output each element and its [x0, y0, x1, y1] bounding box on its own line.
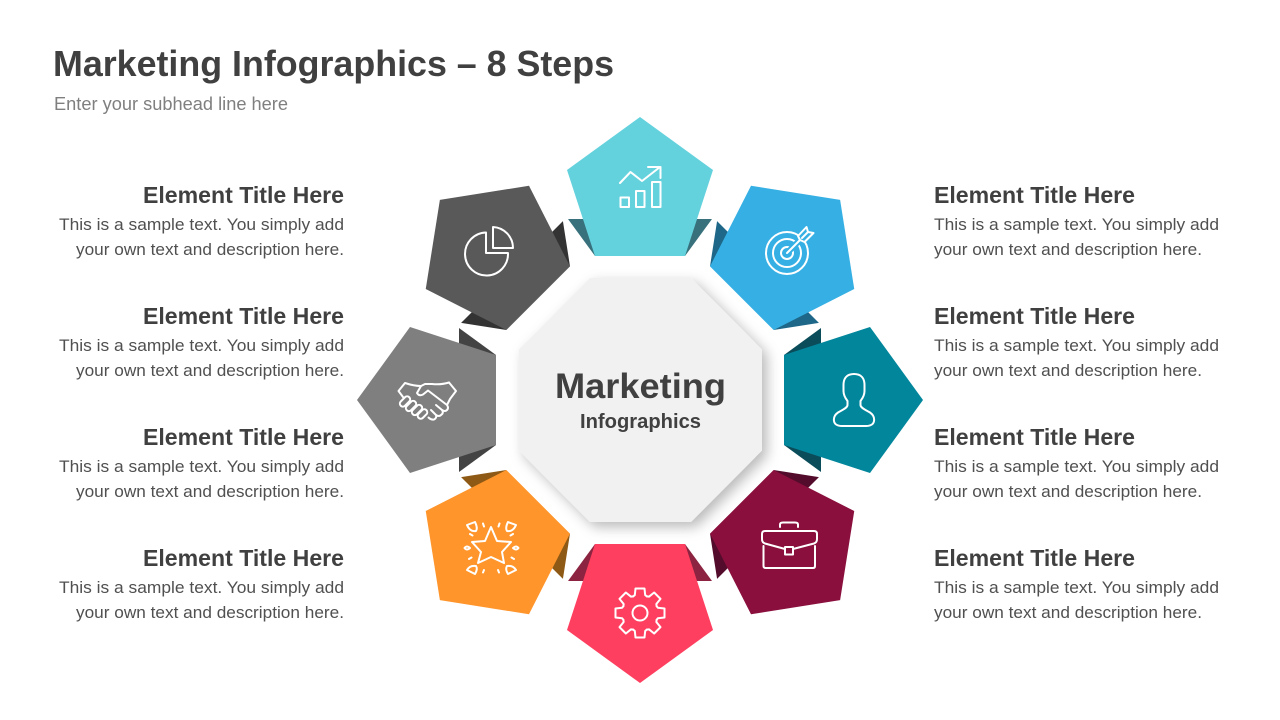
left text block 1: your own text and description here. — [76, 241, 344, 259]
left text block 4 — [59, 545, 344, 622]
right text block 4: Element Title Here — [934, 545, 1135, 571]
pentagon: orange, star — [388, 450, 590, 652]
pentagon: maroon, briefcase — [690, 450, 892, 652]
pentagon: red, gear — [567, 544, 713, 683]
left text block 3: Element Title Here — [143, 424, 344, 450]
right text block 1: This is a sample text. You simply add — [934, 216, 1219, 234]
icon: star with sparkles — [464, 522, 518, 574]
center subheading: Infographics — [580, 411, 701, 433]
title: Marketing Infographics – 8 Steps — [53, 43, 614, 84]
left text block 2: This is a sample text. You simply add — [59, 337, 344, 355]
left text block 2 — [59, 303, 344, 380]
center octagon — [519, 278, 762, 522]
icon: handshake — [398, 382, 456, 420]
left text block 4: your own text and description here. — [76, 604, 344, 622]
left text block 1 — [59, 182, 344, 259]
right text block 1: your own text and description here. — [934, 241, 1202, 259]
right text block 3: Element Title Here — [934, 424, 1135, 450]
right text block 1: Element Title Here — [934, 182, 1135, 208]
icon: person — [834, 374, 874, 426]
right text block 4 — [934, 545, 1219, 622]
right text block 2: your own text and description here. — [934, 362, 1202, 380]
left text block 4: Element Title Here — [143, 545, 344, 571]
right text block 3: This is a sample text. You simply add — [934, 458, 1219, 476]
right text block 3: your own text and description here. — [934, 483, 1202, 501]
left text block 4: This is a sample text. You simply add — [59, 579, 344, 597]
subhead: Enter your subhead line here — [54, 94, 288, 114]
pentagon: dark teal, person — [784, 327, 923, 473]
left text block 3: This is a sample text. You simply add — [59, 458, 344, 476]
icon: growth chart — [620, 167, 660, 207]
right text block 2: This is a sample text. You simply add — [934, 337, 1219, 355]
left text block 2: Element Title Here — [143, 303, 344, 329]
icon: target with arrow — [766, 227, 814, 274]
left text block 1: This is a sample text. You simply add — [59, 216, 344, 234]
left text block 2: your own text and description here. — [76, 362, 344, 380]
right text block 4: your own text and description here. — [934, 604, 1202, 622]
right text block 2: Element Title Here — [934, 303, 1135, 329]
right text block 2 — [934, 303, 1219, 380]
center heading: Marketing — [555, 367, 726, 406]
pentagon: light teal, growth chart — [567, 117, 713, 256]
left text block 3 — [59, 424, 344, 501]
icon: gear — [616, 588, 664, 638]
right text block 1 — [934, 182, 1219, 259]
icon: pie chart — [465, 227, 513, 275]
left text block 1: Element Title Here — [143, 182, 344, 208]
icon: briefcase — [762, 522, 817, 568]
right text block 4: This is a sample text. You simply add — [934, 579, 1219, 597]
right text block 3 — [934, 424, 1219, 501]
left text block 3: your own text and description here. — [76, 483, 344, 501]
pentagon: dark grey, pie chart — [388, 148, 590, 350]
pentagon: blue, target — [690, 148, 892, 350]
pentagon: mid grey, handshake — [357, 327, 496, 473]
